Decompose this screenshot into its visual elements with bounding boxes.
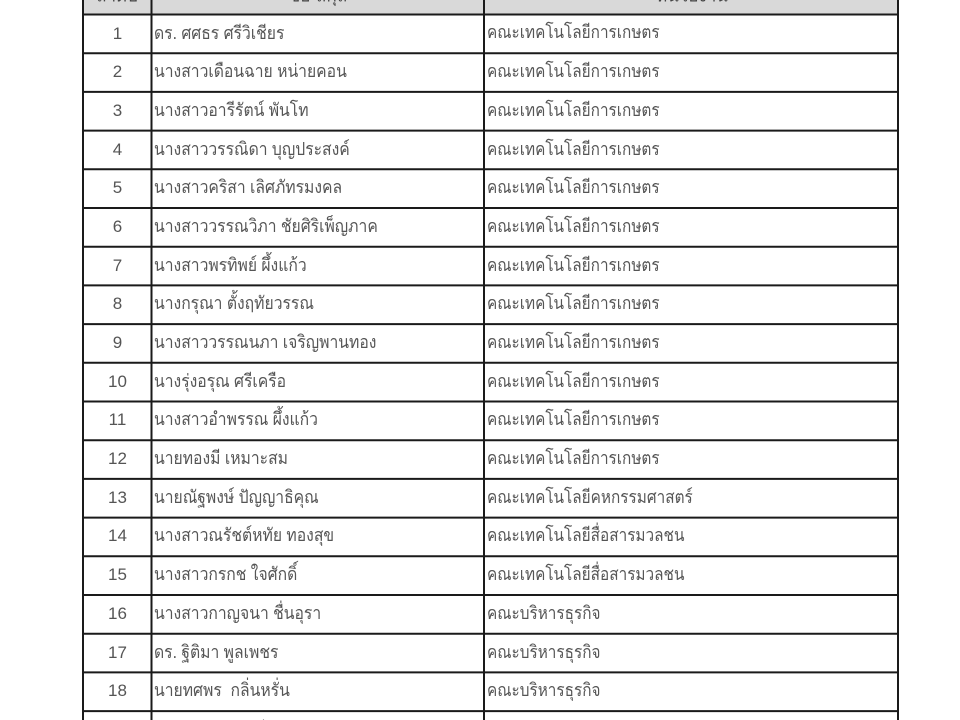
row 17 xyxy=(108,642,601,663)
row 18: คณะบริหารธุรกิจ xyxy=(487,680,601,701)
row 13: นายณัฐพงษ์ ปัญญาธิคุณ xyxy=(154,487,319,508)
row 9: นางสาววรรณนภา เจริญพานทอง xyxy=(154,332,376,352)
row 1: คณะเทคโนโลยีการเกษตร xyxy=(487,21,660,42)
row 8: 8 xyxy=(113,294,122,313)
row 5: คณะเทคโนโลยีการเกษตร xyxy=(487,176,660,197)
row 11 xyxy=(109,406,660,429)
row 9: 9 xyxy=(113,333,122,352)
row 13: 13 xyxy=(108,488,127,507)
row 6: 6 xyxy=(113,217,122,236)
row 7: นางสาวพรทิพย์ ผึ้งแก้ว xyxy=(154,252,307,275)
row 11: นางสาวอำพรรณ ผึ้งแก้ว xyxy=(154,406,318,429)
row 7: คณะเทคโนโลยีการเกษตร xyxy=(487,254,660,275)
row 3: นางสาวอารีรัตน์ พันโท xyxy=(154,99,309,120)
row 5 xyxy=(113,176,660,197)
row 1: 1 xyxy=(113,24,122,43)
row 15 xyxy=(108,561,685,584)
row 3: คณะเทคโนโลยีการเกษตร xyxy=(487,99,660,120)
row 14: 14 xyxy=(108,526,127,545)
row 8 xyxy=(113,290,660,314)
row 3: 3 xyxy=(113,101,122,120)
row 13: คณะเทคโนโลยีคหกรรมศาสตร์ xyxy=(487,486,693,507)
row 14: คณะเทคโนโลยีสื่อสารมวลชน xyxy=(487,522,685,545)
row 15: นางสาวกรกช ใจศักดิ์ xyxy=(154,561,299,584)
row 16 xyxy=(108,600,601,624)
row 16: นางสาวกาญจนา ชื่นอุรา xyxy=(154,600,321,624)
row 12 xyxy=(108,447,660,468)
row 2: นางสาวเดือนฉาย หน่ายคอน xyxy=(154,61,347,81)
row 18 xyxy=(108,677,601,701)
row 6: นางสาววรรณวิภา ชัยศิริเพ็ญภาค xyxy=(154,215,378,236)
row 9: คณะเทคโนโลยีการเกษตร xyxy=(487,331,660,352)
row 4: 4 xyxy=(113,140,122,159)
row 18: นายทศพร กลิ่นหรั่น xyxy=(154,677,290,700)
row 2: คณะเทคโนโลยีการเกษตร xyxy=(487,60,660,81)
row 10: นางรุ่งอรุณ ศรีเครือ xyxy=(154,371,286,392)
row 19 (cut off) xyxy=(108,719,602,720)
row 11: คณะเทคโนโลยีการเกษตร xyxy=(487,408,660,429)
row 12: คณะเทคโนโลยีการเกษตร xyxy=(487,447,660,468)
row 5: นางสาวคริสา เลิศภัทรมงคล xyxy=(154,177,342,197)
row 10 xyxy=(108,370,660,392)
row 3 xyxy=(113,99,660,120)
row 18: 18 xyxy=(108,681,127,700)
row 1: ดร. ศศธร ศรีวิเชียร xyxy=(154,23,284,43)
row 10: 10 xyxy=(108,372,127,391)
row 2 xyxy=(113,60,660,81)
row 4: นางสาววรรณิดา บุญประสงค์ xyxy=(154,139,350,160)
row 11: 11 xyxy=(109,410,126,429)
row 9 xyxy=(113,331,660,352)
row 14 xyxy=(108,522,685,546)
row 7: 7 xyxy=(113,256,122,275)
row 17: ดร. ฐิติมา พูลเพชร xyxy=(154,642,278,663)
row 5: 5 xyxy=(113,178,122,197)
row 6: คณะเทคโนโลยีการเกษตร xyxy=(487,215,660,236)
row 2: 2 xyxy=(113,62,122,81)
row 7 xyxy=(113,252,660,275)
row 16: 16 xyxy=(108,604,127,623)
row 15: 15 xyxy=(108,565,127,584)
row 17: 17 xyxy=(108,643,127,662)
row 1 xyxy=(113,21,660,43)
table header row xyxy=(83,0,898,14)
row 12: 12 xyxy=(108,449,127,468)
row 13 xyxy=(108,486,693,508)
row 15: คณะเทคโนโลยีสื่อสารมวลชน xyxy=(487,561,685,584)
row 17: คณะบริหารธุรกิจ xyxy=(487,642,601,663)
row 10: คณะเทคโนโลยีการเกษตร xyxy=(487,370,660,391)
row 14: นางสาวณรัชต์หทัย ทองสุข xyxy=(154,525,334,546)
row 16: คณะบริหารธุรกิจ xyxy=(487,603,601,624)
row 12: นายทองมี เหมาะสม xyxy=(154,448,288,468)
row 6 xyxy=(113,215,660,236)
row 8: คณะเทคโนโลยีการเกษตร xyxy=(487,292,660,313)
row 4 xyxy=(113,138,660,160)
row 4: คณะเทคโนโลยีการเกษตร xyxy=(487,138,660,159)
row 8: นางกรุณา ตั้งฤทัยวรรณ xyxy=(154,290,314,314)
